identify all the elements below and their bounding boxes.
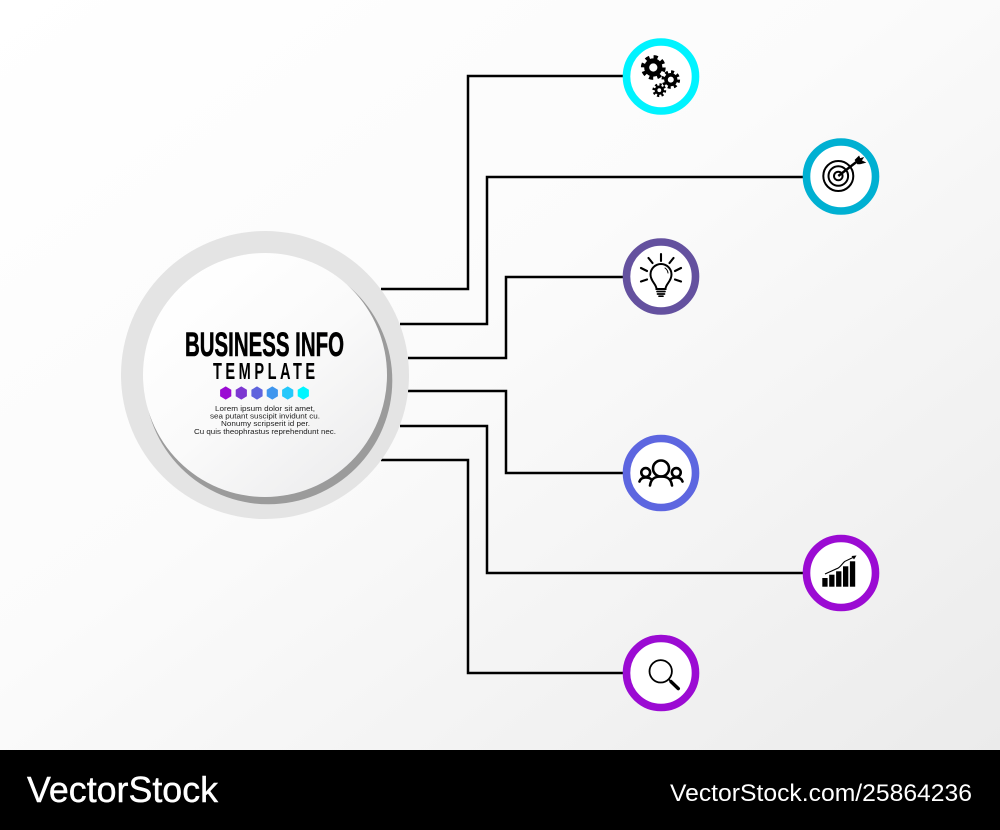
connector lines	[381, 76, 806, 673]
subtitle: template: TEMPLATE	[213, 359, 319, 385]
icon: people group	[640, 460, 682, 486]
body text: Nonumy scripserit id per.	[221, 419, 310, 428]
node: magnifier	[626, 638, 696, 708]
ring: blue-violet	[626, 438, 696, 508]
icon: bar chart with trend	[822, 556, 856, 587]
icon: light bulb	[641, 254, 681, 296]
footer logo text: VectorStock	[27, 769, 219, 810]
connector: magnifier	[381, 460, 626, 673]
disc shadow crescent	[145, 257, 392, 504]
footer bar	[0, 750, 1000, 830]
ring: violet	[626, 638, 696, 708]
outer grey ring	[121, 231, 409, 519]
icon: magnifying glass	[650, 660, 678, 689]
ring: cyan	[626, 42, 696, 111]
node: light bulb	[626, 242, 696, 311]
connector: chart	[400, 426, 806, 573]
body text: sea putant suscipit invidunt cu.	[210, 412, 320, 421]
central hub	[121, 231, 409, 519]
inner white disc	[143, 253, 387, 497]
hexagon colour row	[220, 386, 309, 400]
icon: target with arrow	[823, 156, 866, 191]
footer url: VectorStock.com/25864236	[670, 780, 972, 807]
node: gears	[626, 42, 696, 111]
body text: Lorem ipsum dolor sit amet,	[215, 404, 315, 413]
connector: gears	[381, 76, 626, 289]
node: target	[806, 142, 876, 211]
title: business info: BUSINESS INFO	[185, 326, 344, 364]
body text: Cu quis theophrastus reprehendunt nec.	[194, 427, 336, 436]
ring: purple	[626, 242, 696, 311]
ring: violet	[806, 538, 876, 608]
connector: people	[408, 391, 626, 473]
node: chart	[806, 538, 876, 608]
connector: light bulb	[408, 277, 626, 358]
body text	[194, 404, 336, 436]
connector: target	[400, 177, 806, 324]
node: people	[626, 438, 696, 508]
icon: gears	[643, 57, 679, 96]
ring: teal	[806, 142, 876, 211]
